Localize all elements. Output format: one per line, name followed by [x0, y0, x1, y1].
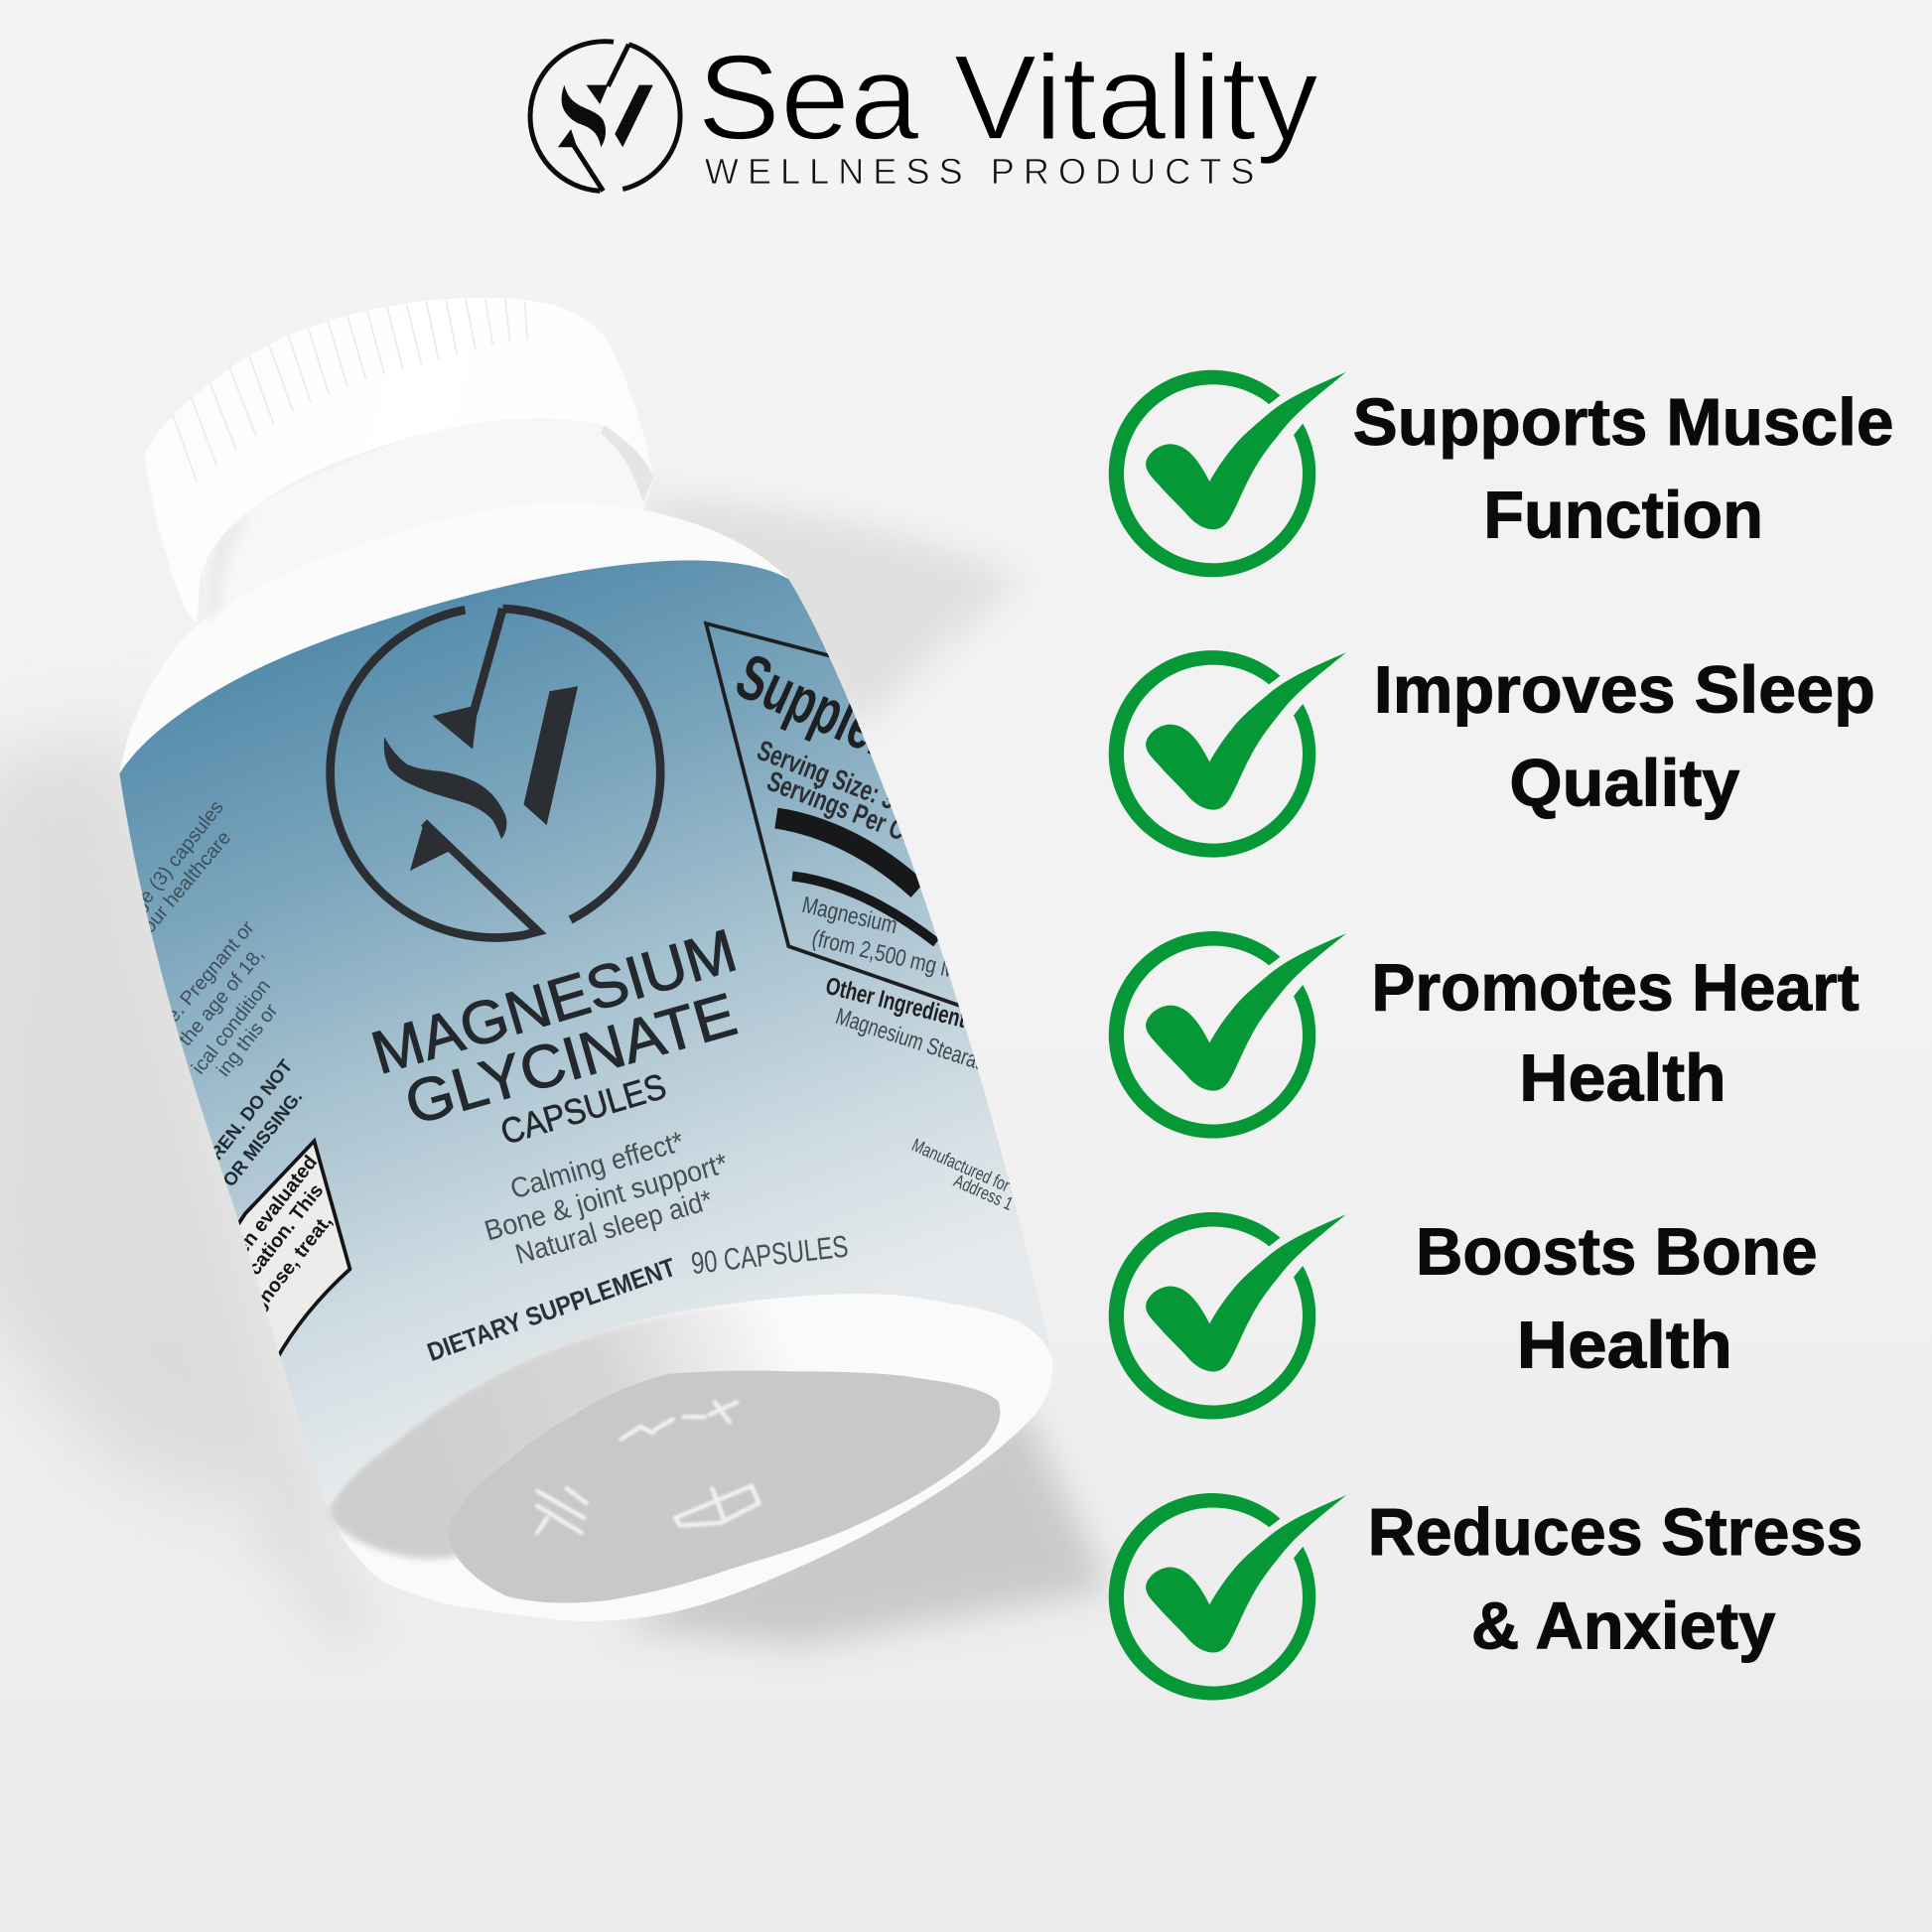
directions text: age. Pregnant or [148, 916, 259, 1043]
supplement facts panel: (from 2,500 mg Magnesium Glycinate) [809, 924, 1126, 1022]
brand tagline: WELLNESS PRODUCTS [705, 151, 1254, 192]
rim shaded crescent [328, 1297, 813, 1559]
warning text: ED OR MISSING. [200, 1086, 306, 1215]
supplement facts panel: Other Ingredients: [823, 971, 985, 1037]
benefit text: & Anxiety [1471, 1589, 1775, 1664]
blue label [119, 560, 1052, 1508]
icon: check [1109, 931, 1346, 1139]
benefit text: Supports Muscle [1353, 385, 1894, 460]
supplement facts panel: Servings Per Container: 30 [762, 765, 1018, 889]
FDA disclaimer box: gnose, treat, [247, 1210, 337, 1316]
bottom rim [328, 1294, 1052, 1621]
icon: check [1109, 370, 1346, 577]
supplement facts panel: Magnesium [799, 892, 899, 939]
benefit 5 [1109, 1493, 1863, 1700]
bottle cap [144, 298, 653, 622]
supplement bottle [119, 298, 1126, 1621]
icon: check [1109, 650, 1346, 858]
benefit text: Quality [1509, 747, 1739, 821]
supplement facts panel: Serving Size: 3 Capsules [753, 735, 990, 851]
benefit list: Natural sleep aid* [512, 1184, 716, 1271]
benefit text [1374, 652, 1875, 821]
benefit 3 [1109, 931, 1860, 1139]
label logo [331, 609, 660, 937]
icon: check [1109, 1493, 1346, 1700]
supplement facts panel: Supplement Facts [726, 639, 1098, 858]
manufacturer text: Address 1 [951, 1171, 1016, 1215]
embossed base marks [537, 1402, 759, 1533]
benefit text: Function [1483, 479, 1763, 553]
FDA disclaimer box: cation. This [243, 1179, 328, 1280]
benefit text: Reduces Stress [1368, 1495, 1863, 1570]
logo mark [530, 42, 680, 191]
directions text: our healthcare [138, 827, 235, 937]
benefit text: Health [1517, 1309, 1732, 1383]
manufacturer text: Manufactured for [908, 1135, 1013, 1196]
label content [143, 604, 1013, 1361]
brand name: Sea Vitality [697, 30, 1318, 165]
FDA disclaimer box: en evaluated [231, 1152, 322, 1259]
dietary supplement: DIETARY SUPPLEMENT [423, 1252, 679, 1367]
icon: check [1109, 1212, 1346, 1420]
product name: MAGNESIUM [364, 916, 744, 1087]
benefit text [1416, 1214, 1818, 1383]
neck shading [204, 510, 252, 622]
benefit list: Bone & joint support* [482, 1148, 732, 1247]
FDA disclaimer box [185, 1141, 349, 1392]
supplement facts panel [703, 621, 978, 1070]
bottle neck [198, 413, 653, 640]
directions text: ge (3) capsules [128, 796, 228, 916]
benefit list: Calming effect* [507, 1126, 687, 1205]
directions text [128, 796, 283, 1081]
benefit text [1371, 951, 1860, 1115]
bottle base recess [449, 1371, 1000, 1603]
bottle shadows [0, 492, 1109, 1651]
benefit text [1368, 1495, 1863, 1664]
cap edge highlight [602, 425, 653, 502]
directions text: ical condition [188, 975, 275, 1078]
warning text: REN. DO NOT [206, 1055, 297, 1164]
cap ribs [173, 300, 527, 483]
bottle body [119, 503, 1052, 1478]
benefit text: Improves Sleep [1374, 652, 1875, 727]
product name line 2: GLYCINATE [398, 980, 744, 1138]
capsules subtitle: CAPSULES [496, 1065, 670, 1153]
directions text: ing this or [212, 1000, 283, 1081]
brand logo header [530, 30, 1318, 192]
benefit text: Boosts Bone [1416, 1214, 1818, 1289]
benefit text: Health [1519, 1040, 1726, 1115]
benefit 2 [1109, 650, 1875, 858]
directions text: the age of 18, [175, 944, 269, 1050]
benefit 4 [1109, 1212, 1818, 1420]
benefit 1 [1109, 370, 1894, 577]
supplement facts panel: Magnesium Stearate [832, 1004, 995, 1078]
benefit text [1353, 385, 1894, 553]
capsule count: 90 CAPSULES [689, 1228, 850, 1281]
benefit text: Promotes Heart [1371, 951, 1860, 1026]
